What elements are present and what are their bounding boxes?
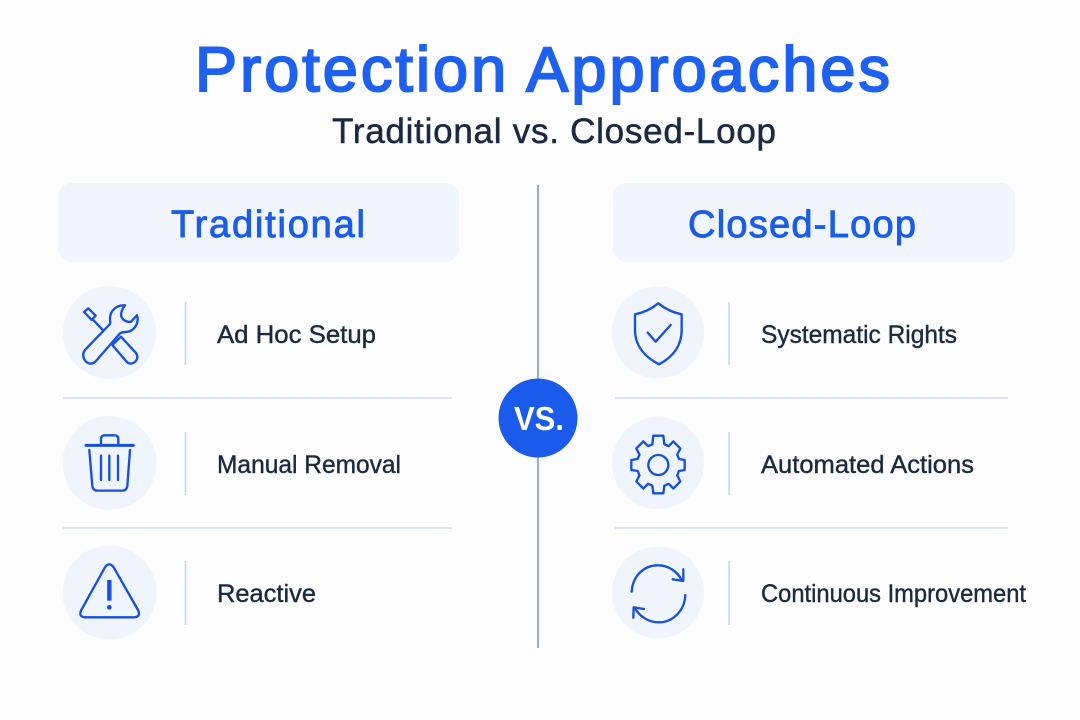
text: automated actions: Automated Actions — [761, 451, 974, 479]
icon: warning triangle — [62, 546, 156, 640]
text: manual removal: Manual Removal — [217, 451, 401, 479]
icon: refresh arrows — [612, 546, 704, 638]
heading: traditional: Traditional — [171, 204, 365, 246]
title: Protection Approaches — [195, 35, 890, 105]
text: continuous improvement: Continuous Improvement — [761, 580, 1026, 608]
vs badge: VS. — [514, 400, 564, 437]
text: ad hoc setup: Ad Hoc Setup — [217, 321, 376, 349]
heading: closed-loop: Closed-Loop — [688, 204, 916, 246]
heading: closed-loop — [613, 183, 1015, 262]
text: systematic rights: Systematic Rights — [761, 321, 957, 349]
icon: gear — [612, 417, 704, 509]
icon: wrench and screwdriver — [63, 286, 156, 379]
panel: closed-loop — [612, 183, 1026, 638]
center divider line — [537, 185, 539, 648]
icon: trash can — [62, 416, 156, 510]
icon: shield with check — [612, 286, 704, 378]
panel: traditional — [58, 183, 459, 640]
heading: traditional — [58, 183, 459, 262]
subtitle: Traditional vs. Closed-Loop — [332, 112, 776, 151]
text: reactive: Reactive — [217, 580, 316, 608]
vs badge — [498, 378, 578, 458]
